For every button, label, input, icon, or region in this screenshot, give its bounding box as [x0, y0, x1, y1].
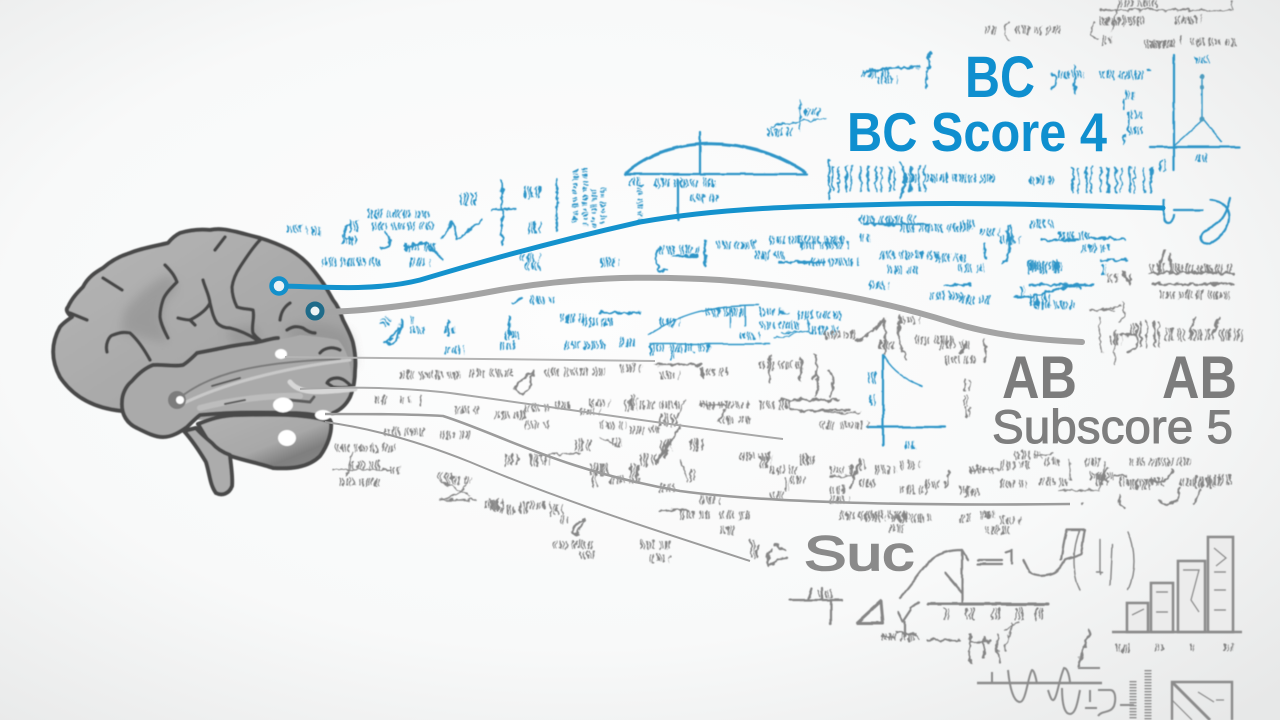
node: blue [272, 278, 286, 294]
white dots [273, 349, 331, 446]
blue arch and line sketches [625, 132, 807, 344]
temporal node [168, 391, 186, 409]
connector line: blue [284, 203, 1163, 288]
icon: temporal lobe [122, 335, 352, 437]
brain folds [70, 237, 352, 388]
blue decay graph [867, 355, 945, 445]
node: dark teal [308, 304, 322, 318]
connector line: gray 4 [325, 422, 750, 561]
gray math notation scribbles [333, 0, 1245, 666]
connector line: gray 3 [325, 414, 1070, 504]
connector line: gray 2 [300, 388, 783, 439]
icon: brain stem [184, 428, 232, 494]
boxed diagonal sketch [1172, 682, 1232, 720]
sine wave sketch [977, 668, 1115, 716]
blue math notation scribbles [287, 52, 1209, 445]
heading: AB right: AB [1162, 344, 1237, 411]
bar chart sketch [1112, 537, 1242, 632]
connector line: gray 1 [285, 357, 655, 361]
handwritten label: Suc: Suc [804, 528, 914, 581]
icon: cerebellum [198, 415, 331, 468]
gray curve graph sketch [790, 530, 1134, 636]
brain illustration [53, 229, 355, 494]
brain shading patches [121, 274, 355, 366]
tall ruler sketch [1120, 670, 1148, 720]
heading: Subscore 5: Subscore 5 [992, 400, 1233, 453]
brain outline [53, 229, 355, 413]
heading: AB left: AB [1002, 344, 1077, 411]
heading: BC Score 4: BC Score 4 [847, 101, 1107, 163]
connector line: gray upper [318, 278, 1082, 342]
icon: brain cerebrum [53, 229, 355, 420]
blue corner graph [1150, 55, 1240, 244]
temporal lobe outline [122, 338, 330, 437]
brain inner white streams [177, 359, 355, 408]
heading: BC: BC [965, 45, 1035, 110]
